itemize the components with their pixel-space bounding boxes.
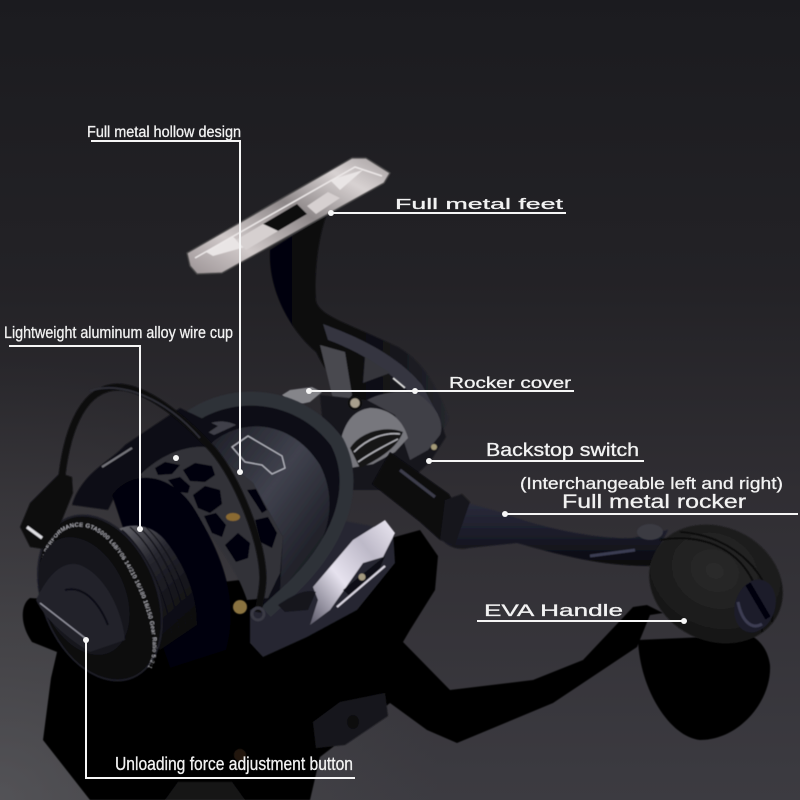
- rotor outer arch: [184, 399, 347, 612]
- callout: full metal rocker, interchangeable: Full metal rocker: [562, 492, 747, 513]
- stem band highlight: [323, 324, 438, 418]
- reel foot and stem: [187, 158, 449, 470]
- bail wire and bracket: [20, 387, 264, 620]
- spool rim text: HIGH PERFORMANCE GTA5000 L68/Y06 14/210 16/180 18/150 Gear Ratio 5.2:1: [41, 522, 158, 669]
- callout: unloading force adjustment button: Unloading force adjustment button: [115, 754, 353, 774]
- plate reflection: [313, 693, 388, 748]
- knob end cap: [728, 574, 782, 638]
- gearbox metal ring: [340, 408, 408, 468]
- spool with line: [36, 514, 197, 682]
- reel main body with aluminum rotor: [72, 398, 395, 668]
- bail bracket: [20, 473, 73, 549]
- rear housing: rocker cover: [282, 378, 446, 490]
- callout: full metal feet: [328, 196, 566, 216]
- hollow honeycomb cup: [140, 447, 283, 614]
- lower body block: [250, 520, 395, 657]
- drag adjustment button: [21, 522, 147, 670]
- logo mark on cup: [232, 436, 285, 474]
- callout: lightweight aluminum alloy wire cup: Lightweight aluminum alloy wire cup: [4, 323, 233, 342]
- callout: lightweight aluminum alloy wire cup: [4, 323, 233, 532]
- silver bail arm plate: [278, 520, 395, 625]
- callout: full metal hollow design: Full metal hollow design: [87, 124, 241, 141]
- callout: full metal hollow design: [87, 124, 243, 475]
- callout: rocker cover: Rocker cover: [449, 375, 572, 392]
- stem chrome web: [320, 345, 352, 420]
- rotor back fill: [180, 398, 348, 610]
- callout: rocker cover: [306, 375, 574, 394]
- callout: backstop switch: [426, 440, 644, 464]
- rotor upper arm: [72, 408, 218, 510]
- crank arm: full metal rocker: [372, 452, 668, 566]
- callout: full metal feet: Full metal feet: [395, 196, 564, 213]
- callout: unloading force adjustment button: [83, 637, 355, 778]
- line spool: [113, 525, 197, 650]
- callout: full metal rocker, interchangeable: [502, 474, 798, 517]
- callout: full metal rocker, interchangeable: (Interchangeable left and right): [520, 474, 783, 493]
- shaft: [372, 452, 458, 540]
- hex bolt: [349, 397, 361, 409]
- stem arm: [270, 214, 449, 470]
- handle knob reflection: [638, 635, 770, 740]
- rocker cover knurled tab: [282, 387, 322, 406]
- foot plate: [187, 158, 390, 274]
- brass screw: [226, 513, 240, 521]
- callout: backstop switch: Backstop switch: [486, 440, 639, 460]
- EVA handle knob: [629, 503, 800, 665]
- rotor cup cylinder: [207, 426, 330, 590]
- window in stem: [363, 357, 390, 383]
- callout: EVA handle: EVA Handle: [484, 601, 623, 620]
- spool front flange: [15, 497, 185, 699]
- front rotor black disc: [112, 478, 231, 668]
- callout: EVA handle: [477, 601, 687, 624]
- hollow cells: [155, 462, 180, 475]
- reflection shadow of reel: [23, 530, 770, 800]
